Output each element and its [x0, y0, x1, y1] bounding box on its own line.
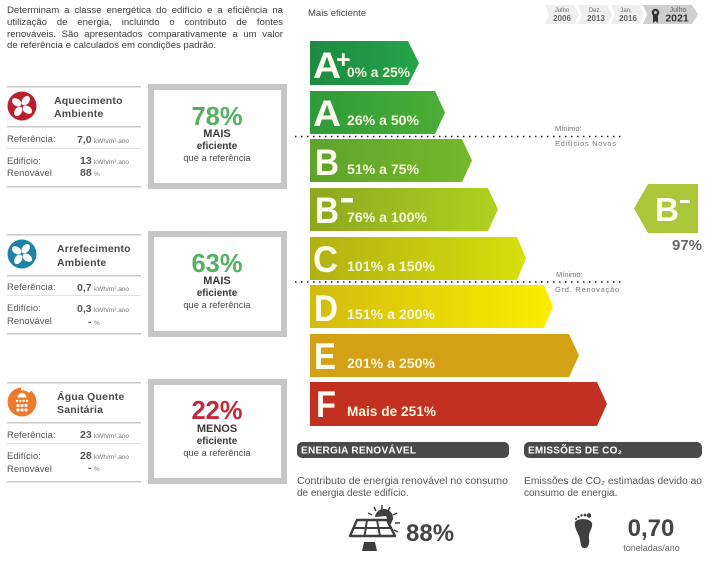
threshold: grande renovacao — [295, 270, 621, 294]
panel: aquecimento result box: eficiente — [197, 141, 238, 152]
panel: aquecimento ambiente — [7, 86, 141, 188]
bar: E: E — [314, 336, 336, 377]
timeline of regulation dates: Dez. — [589, 8, 601, 14]
panel: agua quente sanitaria: - — [88, 462, 92, 474]
heading: mais eficiente: Mais eficiente — [308, 8, 366, 19]
icon: orange shower — [8, 387, 36, 416]
bar: F — [310, 382, 607, 426]
bar: A — [310, 91, 445, 134]
bar: D: D — [314, 288, 338, 329]
panel: energia renovavel: de energia deste edifício. — [297, 488, 409, 499]
rating badge: B- — [634, 184, 702, 254]
panel: energia renovavel: Contributo de energia renovável no consumo — [297, 476, 508, 487]
panel: aquecimento result box: MAIS — [203, 128, 231, 140]
timeline of regulation dates: 2006 — [553, 14, 571, 23]
bar: E — [310, 334, 579, 377]
panel: arrefecimento ambiente: Renovável — [7, 316, 52, 327]
panel: aquecimento ambiente: kWh/m².ano — [94, 159, 129, 166]
panel: aquecimento ambiente: Edifício: — [7, 156, 41, 167]
bar: B: 51% a 75% — [347, 161, 420, 177]
panel: aquecimento result box: 78% — [191, 103, 243, 131]
threshold: grande renovacao: Mínimo: — [556, 270, 583, 279]
bar: A+: + — [336, 46, 351, 74]
panel: energia renovavel: 88% — [406, 520, 454, 547]
panel: energia renovavel: ENERGIA RENOVÁVEL — [301, 444, 416, 456]
panel: emissoes de co2: consumo de energia. — [524, 488, 617, 499]
intro text: utilização de energia, incluindo o contributo de fontes — [7, 17, 283, 28]
panel: aquecimento ambiente: 7,0 — [77, 134, 92, 146]
panel: agua quente sanitaria: kWh/m².ano — [94, 454, 129, 461]
panel: arrefecimento ambiente: Edifício: — [7, 303, 41, 314]
timeline of regulation dates: Julho — [670, 7, 686, 14]
panel: agua quente sanitaria: Edifício: — [7, 451, 41, 462]
panel: arrefecimento ambiente: - — [88, 316, 92, 328]
panel: agua quente sanitaria — [7, 382, 141, 482]
panel: arrefecimento ambiente: kWh/m².ano — [94, 307, 129, 314]
icon: solar panel — [350, 505, 400, 551]
timeline of regulation dates: 2016 — [619, 14, 637, 23]
bar: C — [310, 237, 526, 280]
panel: arrefecimento result box: eficiente — [197, 288, 238, 299]
bar: B- — [310, 188, 498, 231]
panel: emissoes de co2: 0,70 — [628, 515, 674, 542]
panel: agua quente result box: eficiente — [197, 436, 238, 447]
bar: F: Mais de 251% — [347, 403, 437, 419]
panel: aquecimento ambiente: 88 — [80, 167, 92, 179]
panel: emissoes de co2: EMISSÕES DE CO₂ — [528, 444, 622, 456]
panel: arrefecimento result box — [151, 234, 284, 334]
energy class bars — [310, 41, 607, 426]
panel: emissoes de co2 — [524, 442, 702, 553]
bar: D: 151% a 200% — [347, 306, 436, 322]
bar: D — [310, 285, 553, 329]
bar: A+: A — [313, 45, 341, 86]
panel: agua quente result box — [151, 382, 284, 481]
panel: energia renovavel — [297, 442, 509, 551]
icon: blue fan — [8, 240, 36, 268]
timeline of regulation dates: Jan. — [620, 8, 632, 14]
intro text — [7, 5, 283, 51]
panel: agua quente sanitaria: % — [94, 466, 100, 473]
panel: aquecimento ambiente: Ambiente — [54, 108, 103, 120]
bar: A: A — [313, 93, 341, 134]
panel: arrefecimento ambiente: 0,3 — [77, 303, 92, 315]
rating percentage: 97% — [672, 237, 702, 254]
panel: aquecimento ambiente: Referência: — [7, 134, 56, 145]
panel: arrefecimento ambiente: Referência: — [7, 282, 56, 293]
timeline of regulation dates: 2013 — [587, 14, 605, 23]
panel: agua quente sanitaria: 23 — [80, 429, 92, 441]
bar: A: 26% a 50% — [347, 112, 420, 128]
panel: agua quente sanitaria: Renovável — [7, 464, 52, 475]
timeline of regulation dates — [545, 5, 698, 24]
bar: F: F — [316, 384, 336, 425]
panel: agua quente sanitaria: Água Quente — [57, 390, 125, 403]
bar: E: 201% a 250% — [347, 355, 436, 371]
icon: red fan — [8, 92, 36, 120]
threshold: edificios novos — [295, 124, 621, 148]
intro text: Determinam a classe energética do edifício e a eficiência na — [7, 5, 283, 16]
panel: emissoes de co2: Emissões de CO₂ estimadas devido ao — [524, 476, 702, 487]
panel: arrefecimento ambiente: % — [94, 320, 100, 327]
panel: arrefecimento ambiente: Arrefecimento — [57, 243, 131, 255]
panel: emissoes de co2: toneladas/ano — [623, 543, 680, 553]
panel: aquecimento ambiente: Renovável — [7, 168, 52, 179]
panel: aquecimento ambiente: 13 — [80, 155, 92, 167]
panel: agua quente sanitaria: 28 — [80, 450, 92, 462]
intro text: de referência e calculados em condições padrão. — [7, 40, 216, 51]
timeline of regulation dates: Julho — [555, 8, 570, 14]
panel: arrefecimento result box: que a referência — [183, 300, 251, 310]
bar: A+ — [310, 41, 419, 86]
panel: agua quente result box: MENOS — [197, 423, 237, 435]
bar: B-: B — [315, 190, 339, 231]
panel: aquecimento result box — [151, 87, 284, 186]
panel: arrefecimento ambiente: Ambiente — [57, 257, 106, 269]
panel: aquecimento ambiente: kWh/m².ano — [94, 138, 129, 145]
threshold: edificios novos: Mínimo: — [555, 124, 582, 133]
panel: agua quente sanitaria: Sanitária — [57, 404, 103, 416]
bar: B-: 76% a 100% — [347, 209, 428, 225]
bar: C: C — [313, 239, 338, 280]
timeline of regulation dates: 2021 — [665, 12, 689, 24]
bar: A+: 0% a 25% — [347, 64, 411, 80]
panel: arrefecimento ambiente: 0,7 — [77, 282, 92, 294]
icon: footprint — [575, 513, 592, 548]
panel: arrefecimento result box: MAIS — [203, 275, 231, 287]
panel: agua quente result box: que a referência — [183, 448, 251, 458]
panel: agua quente sanitaria: kWh/m².ano — [94, 433, 129, 440]
panel: aquecimento ambiente: % — [94, 171, 100, 178]
panel: arrefecimento result box: 63% — [191, 250, 243, 278]
threshold: edificios novos: Edifícios Novos — [555, 139, 616, 148]
panel: arrefecimento ambiente: kWh/m².ano — [94, 286, 129, 293]
intro text: renováveis. São apresentados comparativamente a um valor — [7, 29, 283, 40]
bar: B: B — [315, 142, 339, 183]
panel: aquecimento result box: que a referência — [183, 153, 251, 163]
panel: agua quente result box: 22% — [191, 397, 243, 425]
rating badge: B-: B — [655, 191, 679, 228]
panel: aquecimento ambiente: Aquecimento — [54, 95, 123, 107]
threshold: grande renovacao: Grd. Renovação — [555, 285, 619, 294]
bar: C: 101% a 150% — [347, 258, 436, 274]
icon: ribbon — [652, 9, 659, 23]
panel: agua quente sanitaria: Referência: — [7, 430, 56, 441]
panel: arrefecimento ambiente — [7, 234, 141, 334]
bar: B — [310, 139, 472, 183]
